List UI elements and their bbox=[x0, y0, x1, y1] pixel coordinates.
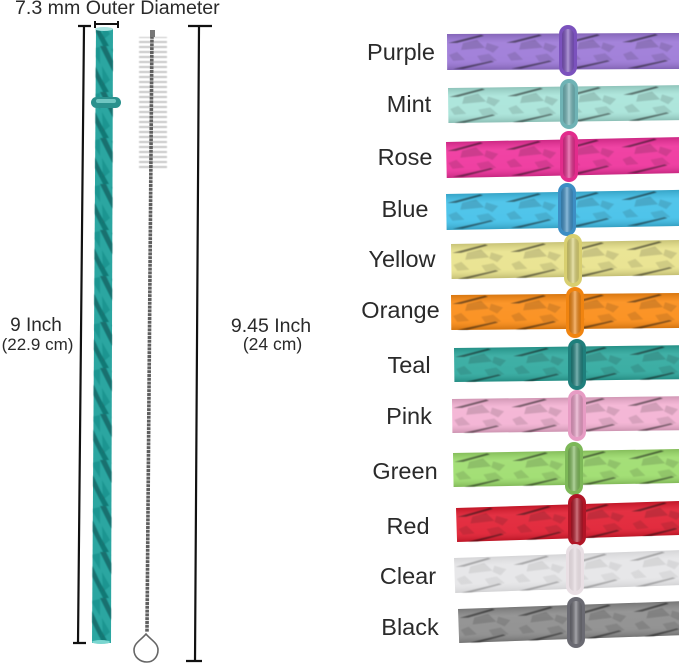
color label: Mint: Mint bbox=[387, 91, 432, 117]
straw: purple bbox=[447, 25, 679, 76]
label: straw length: 9 Inch bbox=[10, 315, 62, 336]
color label: Yellow: Yellow bbox=[368, 246, 437, 272]
brush length bar bbox=[186, 26, 212, 661]
label: brush length cm: (24 cm) bbox=[243, 334, 302, 354]
straw: black bbox=[458, 597, 679, 648]
straw: orange bbox=[451, 287, 679, 338]
color label: Clear: Clear bbox=[380, 563, 436, 589]
color label: Teal: Teal bbox=[387, 352, 431, 378]
straw: green bbox=[453, 442, 679, 495]
straw: mint bbox=[448, 79, 679, 129]
straw: rose bbox=[446, 131, 679, 182]
diameter marker bbox=[95, 21, 118, 28]
cleaning brush bbox=[134, 30, 167, 662]
label: straw length cm: (22.9 cm) bbox=[2, 335, 73, 354]
straw: pink bbox=[452, 390, 679, 441]
color label: Rose: Rose bbox=[378, 144, 432, 170]
color label: Black: Black bbox=[381, 614, 439, 640]
color label: Blue: Blue bbox=[381, 196, 429, 222]
straw: blue bbox=[446, 183, 679, 236]
color label: Pink: Pink bbox=[386, 403, 432, 429]
straw: yellow bbox=[451, 234, 679, 287]
label: brush length: 9.45 Inch bbox=[231, 315, 311, 337]
straw: red bbox=[456, 494, 679, 546]
color label: Green: Green bbox=[372, 458, 438, 484]
color label: Purple: Purple bbox=[367, 39, 435, 65]
straw: clear bbox=[454, 544, 679, 595]
straw: teal bbox=[454, 339, 679, 390]
teal straw, full length bbox=[91, 27, 121, 644]
straw length bar bbox=[73, 26, 91, 643]
color label: Red: Red bbox=[386, 513, 430, 539]
color label: Orange: Orange bbox=[361, 297, 440, 323]
